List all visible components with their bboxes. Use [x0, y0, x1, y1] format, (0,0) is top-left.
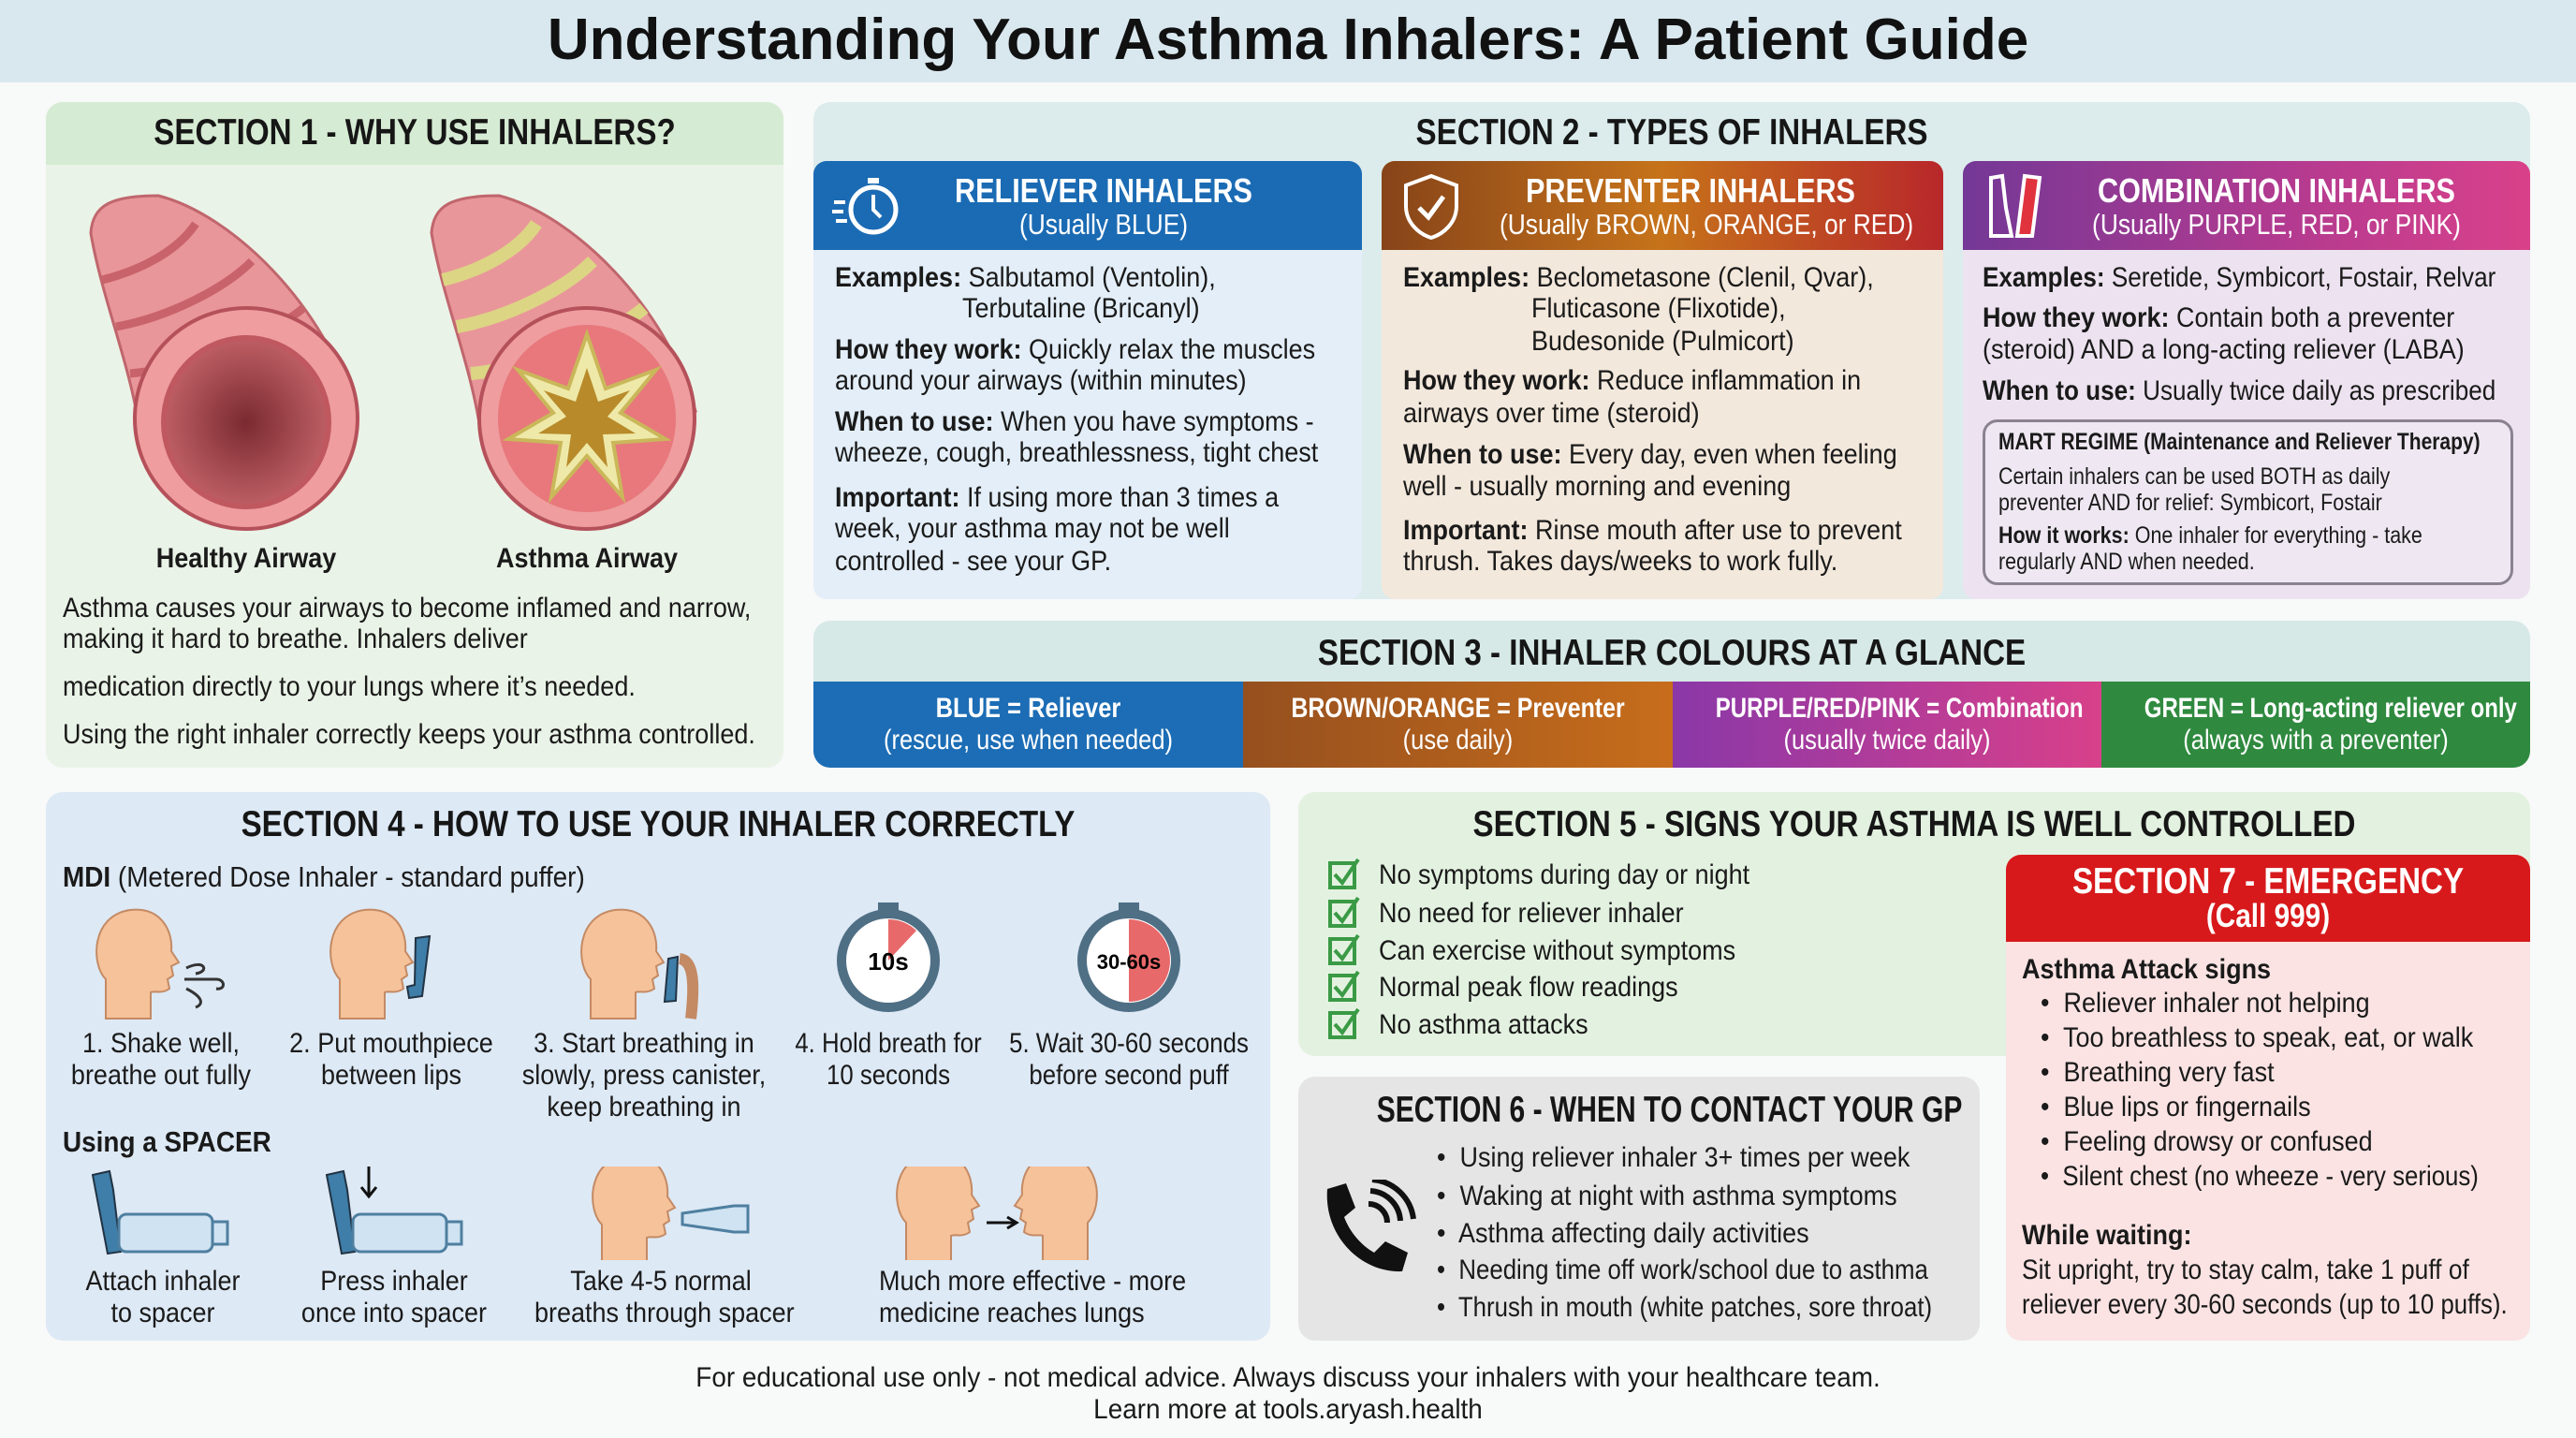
attack signs list: • Reliever inhaler not helping: [2041, 988, 2370, 1019]
combination body: When to use: Usually twice daily as prescribed: [1983, 375, 2496, 406]
checklist: Normal peak flow readings: [1379, 972, 1678, 1003]
section 1 body text: Asthma causes your airways to become inflamed and narrow,: [63, 593, 751, 624]
panel: section 7 emergency: [2006, 855, 2530, 1341]
reliever header: [813, 161, 1362, 250]
preventer body: Fluticasone (Flixotide),: [1531, 293, 1786, 324]
preventer body: Examples: Beclometasone (Clenil, Qvar),: [1403, 262, 1874, 293]
combination header: (Usually PURPLE, RED, or PINK): [2092, 208, 2461, 241]
title band: [0, 0, 2576, 82]
emergency header: (Call 999): [2206, 898, 2330, 934]
GP bullet list: • Waking at night with asthma symptoms: [1437, 1181, 1897, 1211]
section 1 body text: Using the right inhaler correctly keeps your asthma controlled.: [63, 719, 755, 750]
MDI step labels: [71, 1028, 1249, 1123]
MDI step labels: before second puff: [1029, 1060, 1229, 1091]
reliever body: Examples: Salbutamol (Ventolin),: [835, 262, 1216, 293]
attack signs list: [2022, 954, 2479, 1192]
spacer subheading: Using a SPACER: [63, 1125, 271, 1158]
spacer step icons: [92, 1167, 1098, 1260]
colour strip: green: GREEN = Long-acting reliever only: [2144, 693, 2517, 724]
spacer step labels: Attach inhaler: [85, 1266, 241, 1297]
MDI steps icons: 30-60s: [1097, 950, 1161, 974]
section 6 header: SECTION 6 - WHEN TO CONTACT YOUR GP: [1377, 1090, 1962, 1130]
colour strip: green: (always with a preventer): [2183, 725, 2449, 756]
GP bullet list: • Using reliever inhaler 3+ times per week: [1437, 1142, 1910, 1173]
callout: MART regime: Certain inhalers can be used BOTH as daily: [1998, 463, 2390, 490]
MDI step labels: 1. Shake well,: [82, 1028, 240, 1059]
reliever body: controlled - see your GP.: [835, 546, 1111, 577]
MDI steps icons: 10s: [868, 947, 909, 976]
section 5 header: SECTION 5 - SIGNS YOUR ASTHMA IS WELL CONTROLLED: [1473, 804, 2355, 844]
combination body: How they work: Contain both a preventer: [1983, 302, 2454, 333]
MDI step labels: 5. Wait 30-60 seconds: [1009, 1028, 1249, 1059]
MDI step labels: 3. Start breathing in: [534, 1028, 754, 1059]
attack signs list: • Blue lips or fingernails: [2041, 1092, 2311, 1123]
section 1 header: SECTION 1 - WHY USE INHALERS?: [154, 112, 676, 153]
preventer body: [1403, 262, 1902, 577]
panel: section 6 contact GP: [1298, 1077, 1980, 1341]
footer: [695, 1362, 1881, 1425]
section 1 header: [46, 102, 783, 165]
colour strip: purple/red/pink: [1673, 682, 2101, 768]
checklist: No asthma attacks: [1379, 1009, 1588, 1040]
combination header: [1963, 161, 2530, 250]
checklist: Can exercise without symptoms: [1379, 935, 1735, 966]
panel: section 5 well controlled: [1298, 792, 2530, 1056]
preventer header: [1382, 161, 1943, 250]
spacer step labels: to spacer: [110, 1298, 215, 1328]
illustration: healthy and asthma airways: [90, 195, 697, 531]
emergency header: [2006, 855, 2530, 942]
spacer step labels: Much more effective - more: [879, 1266, 1186, 1297]
colour strip: blue: (rescue, use when needed): [884, 725, 1173, 756]
spacer step labels: Press inhaler: [320, 1266, 468, 1297]
preventer body: How they work: Reduce inflammation in: [1403, 365, 1861, 396]
reliever body: week, your asthma may not be well: [835, 513, 1230, 544]
callout: MART regime: MART REGIME (Maintenance and Reliever Therapy): [1998, 429, 2481, 455]
colour strip: blue: BLUE = Reliever: [936, 693, 1120, 724]
while waiting text: reliever every 30-60 seconds (up to 10 puffs).: [2022, 1289, 2508, 1320]
icon: phone: [1327, 1180, 1416, 1271]
preventer body: When to use: Every day, even when feeling: [1403, 439, 1897, 470]
preventer header: (Usually BROWN, ORANGE, or RED): [1500, 208, 1913, 241]
reliever header: RELIEVER INHALERS: [955, 171, 1252, 210]
MDI step labels: 4. Hold breath for: [795, 1028, 982, 1059]
reliever header: (Usually BLUE): [1019, 208, 1188, 241]
while waiting text: Sit upright, try to stay calm, take 1 puff of: [2022, 1255, 2469, 1285]
GP bullet list: [1437, 1142, 1932, 1323]
section 1 body text: making it hard to breathe. Inhalers deliver: [63, 624, 528, 654]
callout: MART regime: preventer AND for relief: Symbicort, Fostair: [1998, 490, 2382, 516]
icon: two inhalers: [1989, 174, 2042, 238]
MDI step labels: keep breathing in: [547, 1092, 741, 1123]
colour strip: blue: [813, 682, 1243, 768]
MDI step labels: breathe out fully: [71, 1060, 251, 1091]
preventer body: thrush. Takes days/weeks to work fully.: [1403, 546, 1837, 577]
checklist: No symptoms during day or night: [1379, 859, 1749, 890]
footer: For educational use only - not medical advice. Always discuss your inhalers with your healthcare team.: [695, 1362, 1881, 1393]
spacer step labels: once into spacer: [301, 1298, 487, 1328]
icon: shield: [1404, 174, 1458, 240]
GP bullet list: • Asthma affecting daily activities: [1437, 1218, 1809, 1249]
colour strip: green: [2101, 682, 2530, 768]
callout: MART regime: How it works: One inhaler for everything - take: [1998, 522, 2422, 549]
attack signs list: • Breathing very fast: [2041, 1057, 2275, 1088]
colour strip: brown/orange: [1243, 682, 1673, 768]
callout: MART regime: regularly AND when needed.: [1998, 549, 2255, 575]
spacer step labels: medicine reaches lungs: [879, 1298, 1145, 1328]
spacer step labels: breaths through spacer: [534, 1298, 795, 1328]
card: preventer inhalers: [1382, 161, 1943, 599]
attack signs list: • Silent chest (no wheeze - very serious): [2041, 1161, 2479, 1192]
reliever body: How they work: Quickly relax the muscles: [835, 334, 1315, 365]
panel: section 3 inhaler colours: [813, 621, 2530, 768]
preventer body: well - usually morning and evening: [1403, 471, 1791, 502]
MDI step labels: 10 seconds: [827, 1060, 950, 1091]
MDI steps icons: [95, 902, 1180, 1020]
callout: MART regime: [1983, 419, 2513, 585]
section 2 header: SECTION 2 - TYPES OF INHALERS: [1415, 112, 1928, 153]
icon: stopwatch: [832, 178, 899, 234]
section 1 body text: [63, 593, 755, 750]
GP bullet list: • Needing time off work/school due to asthma: [1437, 1255, 1928, 1285]
reliever body: [835, 262, 1318, 577]
card: reliever inhalers: [813, 161, 1362, 599]
reliever body: Important: If using more than 3 times a: [835, 482, 1279, 513]
title: Understanding Your Asthma Inhalers: A Patient Guide: [548, 7, 2028, 72]
label: asthma airway: Asthma Airway: [496, 543, 678, 574]
checklist: [1328, 858, 1749, 1040]
spacer step labels: Take 4-5 normal: [570, 1266, 752, 1297]
section 3 header: SECTION 3 - INHALER COLOURS AT A GLANCE: [1318, 633, 2026, 673]
combination header: COMBINATION INHALERS: [2098, 171, 2455, 210]
colour strip: brown/orange: (use daily): [1403, 725, 1513, 756]
combination body: [1983, 262, 2496, 406]
panel: section 1 why use inhalers: [46, 102, 783, 768]
panel: section 4 how to use: [46, 792, 1270, 1341]
reliever body: around your airways (within minutes): [835, 365, 1247, 396]
while waiting text: While waiting:: [2022, 1220, 2191, 1251]
checklist: No need for reliever inhaler: [1379, 898, 1684, 929]
MDI subheading: MDI (Metered Dose Inhaler - standard puffer): [63, 860, 585, 893]
reliever body: When to use: When you have symptoms -: [835, 406, 1314, 437]
colour strip: purple/red/pink: (usually twice daily): [1783, 725, 1991, 756]
reliever body: Terbutaline (Bricanyl): [962, 293, 1200, 324]
section 4 header: SECTION 4 - HOW TO USE YOUR INHALER CORRECTLY: [242, 804, 1075, 844]
card: combination inhalers: [1963, 161, 2530, 599]
spacer step labels: [85, 1266, 1186, 1328]
while waiting text: [2022, 1220, 2508, 1320]
colour strip: purple/red/pink: PURPLE/RED/PINK = Combination: [1716, 693, 2084, 724]
attack signs list: • Too breathless to speak, eat, or walk: [2041, 1022, 2473, 1053]
combination body: Examples: Seretide, Symbicort, Fostair, Relvar: [1983, 262, 2496, 293]
footer: Learn more at tools.aryash.health: [1093, 1394, 1483, 1425]
attack signs list: • Feeling drowsy or confused: [2041, 1126, 2373, 1157]
MDI step labels: 2. Put mouthpiece: [289, 1028, 493, 1059]
preventer body: Budesonide (Pulmicort): [1531, 326, 1794, 357]
MDI step labels: between lips: [321, 1060, 461, 1091]
preventer body: airways over time (steroid): [1403, 398, 1700, 429]
label: healthy airway: Healthy Airway: [156, 543, 336, 574]
section 1 body text: medication directly to your lungs where it’s needed.: [63, 671, 636, 702]
combination body: (steroid) AND a long-acting reliever (LABA): [1983, 334, 2465, 365]
panel: section 2 types of inhalers: [813, 102, 2530, 599]
GP bullet list: • Thrush in mouth (white patches, sore throat): [1437, 1292, 1932, 1323]
preventer header: PREVENTER INHALERS: [1526, 171, 1855, 210]
preventer body: Important: Rinse mouth after use to prevent: [1403, 515, 1902, 546]
MDI step labels: slowly, press canister,: [522, 1060, 766, 1091]
colour strip: brown/orange: BROWN/ORANGE = Preventer: [1291, 693, 1625, 724]
attack signs list: Asthma Attack signs: [2022, 954, 2271, 985]
emergency header: SECTION 7 - EMERGENCY: [2072, 861, 2464, 902]
reliever body: wheeze, cough, breathlessness, tight chest: [835, 437, 1318, 468]
